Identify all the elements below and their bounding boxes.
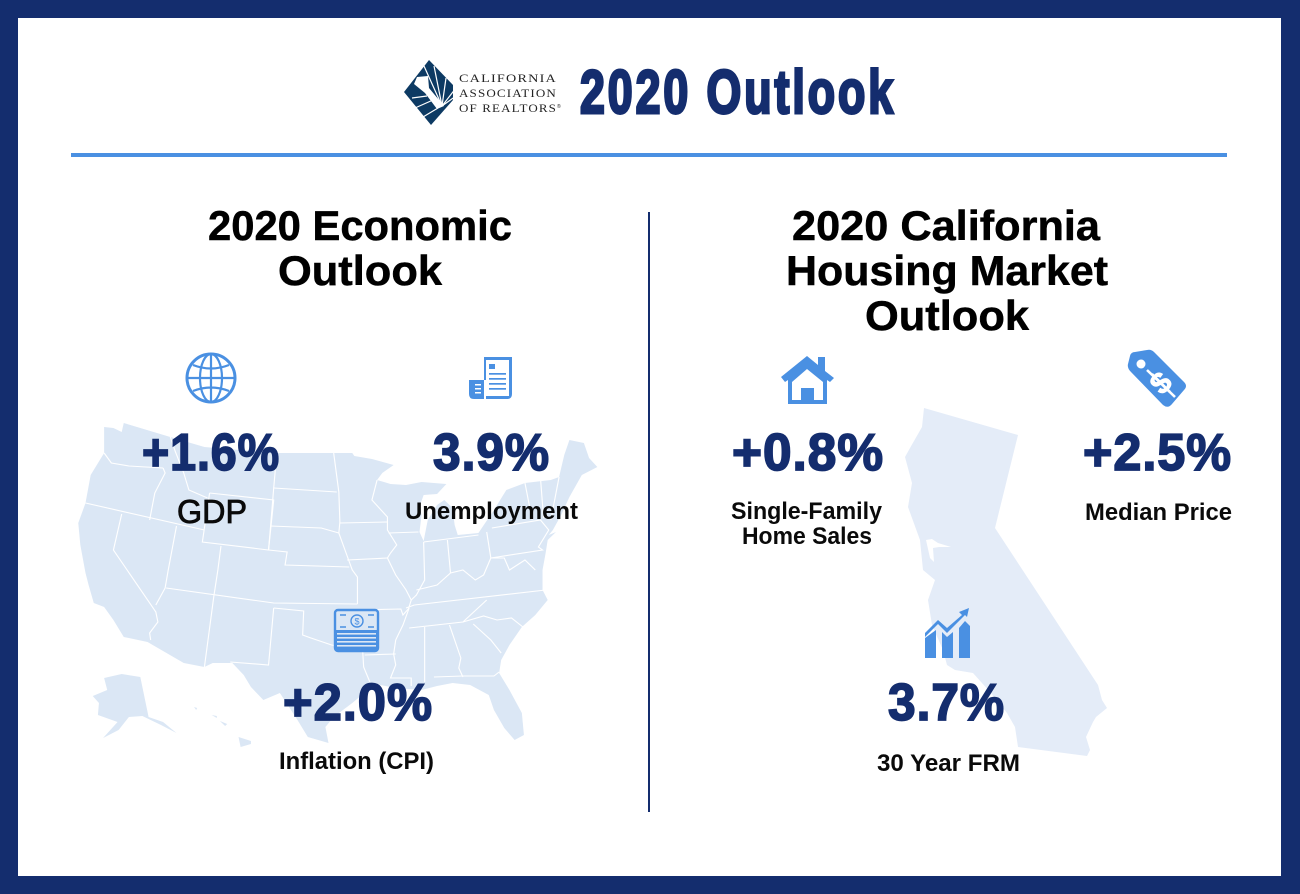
panel: economic outlook (78, 202, 597, 775)
stat: unemployment: 3.9% (433, 424, 550, 482)
heading: economic outlook (208, 202, 512, 294)
icon: house (781, 356, 834, 404)
icon: price tag: $ (1144, 366, 1179, 401)
logo: California Association of Realtors: CALIFORNIA (459, 73, 557, 85)
stat: median price (1083, 350, 1232, 526)
stat: single-family home sales: Home Sales (742, 523, 872, 550)
icon: rising bar chart (925, 608, 970, 658)
stat: inflation: Inflation (CPI) (279, 748, 434, 775)
bay (926, 539, 951, 562)
panel: California housing market outlook (731, 202, 1232, 777)
stat: median price: Median Price (1085, 499, 1232, 526)
icon: newspaper (469, 357, 512, 399)
stat: unemployment: Unemployment (405, 498, 578, 525)
heading: housing market outlook: Housing Market (786, 247, 1108, 294)
icon: price tag (1128, 350, 1186, 407)
logo: California Association of Realtors (404, 60, 561, 125)
heading: housing market outlook (786, 202, 1108, 339)
column divider (648, 212, 650, 812)
stat: median price: +2.5% (1083, 424, 1232, 482)
stat: 30 year FRM: 3.7% (888, 674, 1005, 732)
stat: 30 year FRM: 30 Year FRM (877, 750, 1020, 777)
stat: inflation (279, 610, 434, 775)
stat: unemployment (405, 357, 578, 525)
map: California (905, 408, 1107, 756)
heading: economic outlook: 2020 Economic (208, 202, 512, 249)
heading: housing market outlook: 2020 California (792, 202, 1101, 249)
icon: globe (187, 354, 235, 402)
heading: housing market outlook: Outlook (865, 292, 1030, 339)
header rule (71, 153, 1227, 157)
stat: 30 year FRM (877, 608, 1020, 777)
icon: money stack: $ (354, 616, 360, 626)
stat: GDP: GDP (177, 493, 247, 530)
stat: inflation: +2.0% (283, 674, 433, 732)
stat: single-family home sales: +0.8% (732, 424, 884, 482)
stat: GDP: +1.6% (142, 424, 280, 482)
stat: single-family home sales (731, 356, 884, 550)
stat: single-family home sales: Single-Family (731, 498, 883, 525)
title: 2020 Outlook (580, 58, 896, 126)
logo: California Association of Realtors: ® (557, 103, 561, 110)
stat: GDP (142, 354, 280, 530)
icon: money stack (335, 610, 378, 651)
heading: economic outlook: Outlook (278, 247, 443, 294)
map: United States (78, 423, 597, 747)
logo: California Association of Realtors: OF REALTORS (459, 103, 557, 115)
logo: California Association of Realtors: ASSOCIATION (459, 88, 557, 100)
